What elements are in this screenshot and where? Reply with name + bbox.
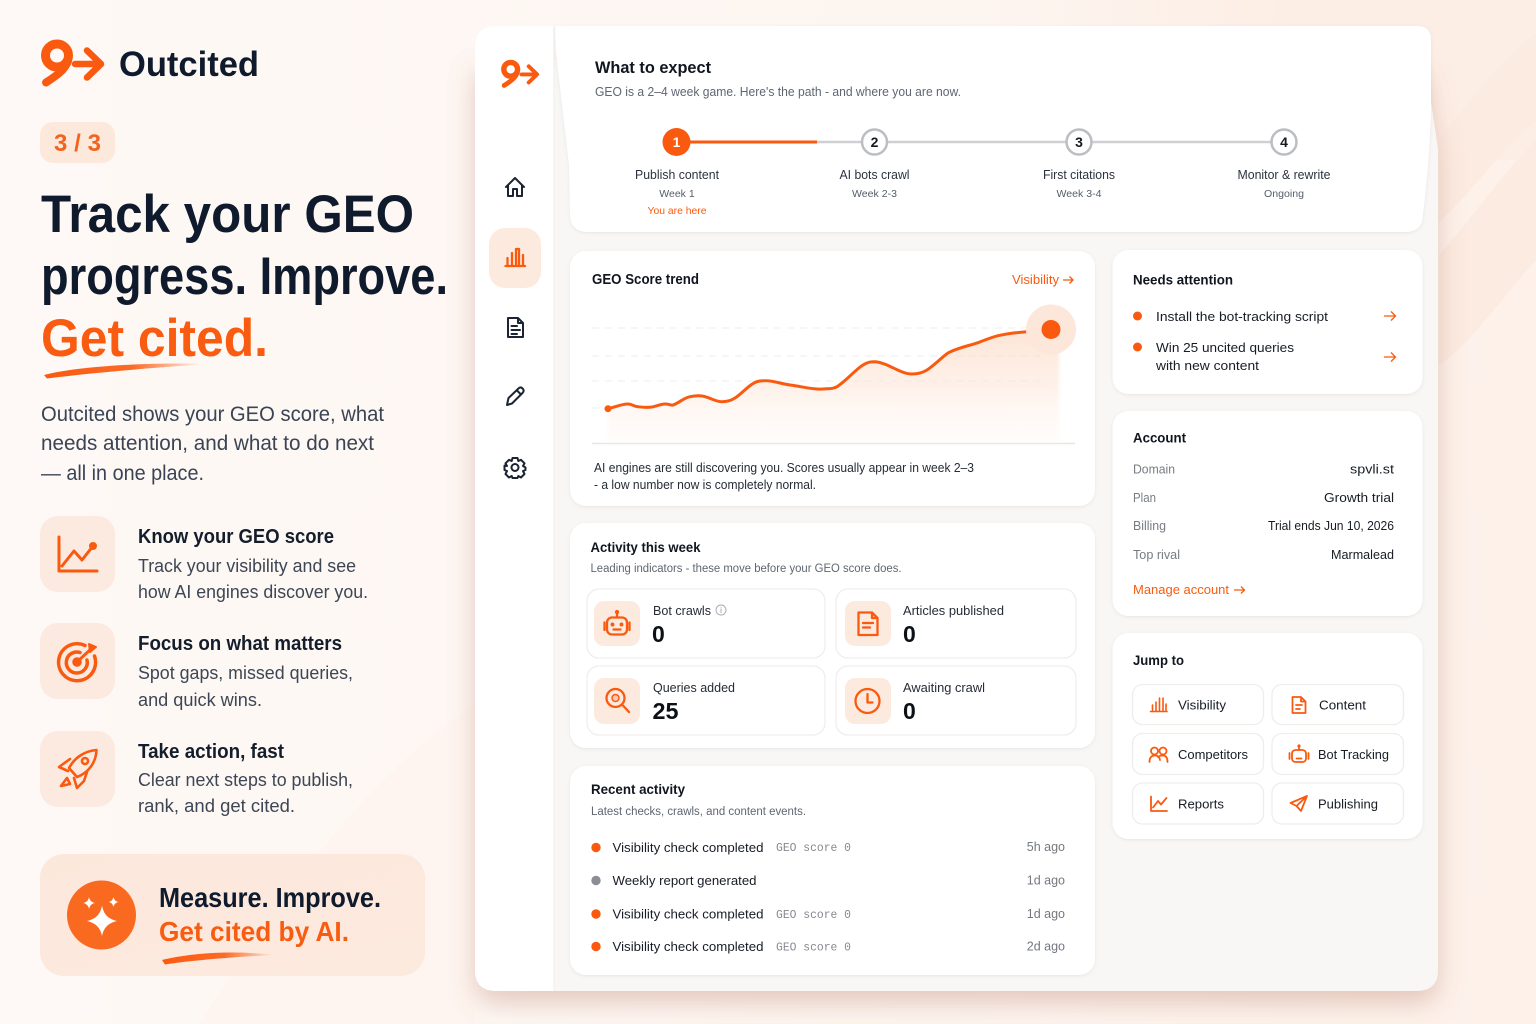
line chart [592,304,1076,444]
button: visibility [1132,684,1264,724]
link: manage account: Manage account [1133,583,1230,597]
panel: needs attention: Needs attention [1133,272,1233,288]
headline underline [44,364,205,378]
button: reports: Reports [1178,796,1224,812]
item: install script [1133,309,1396,324]
icon: rocket [59,750,96,788]
step 4: Monitor & rewrite [1238,168,1331,182]
panel: activity this week: Leading indicators - these move before your GEO score does. [590,563,902,575]
account rows: Marmalead [1331,548,1394,562]
item: win queries [1133,340,1396,373]
account rows: Billing [1133,519,1166,533]
panel: activity this week [570,523,1095,748]
feature: know your score [40,516,368,602]
feature: take action: rank, and get cited. [138,796,295,816]
icon: info: i [720,606,722,615]
icon: sparkles [67,880,136,950]
icon: logo mark [46,44,101,82]
step 1 [635,128,720,217]
stat: bot crawls [587,589,825,658]
panel: GEO score trend: GEO Score trend [592,272,699,288]
item: win queries: Win 25 uncited queries [1156,340,1295,355]
row 2: 1d ago [1027,874,1065,888]
step 3: First citations [1043,168,1115,182]
button: bot tracking: Bot Tracking [1318,747,1389,762]
feature: focus [40,623,353,710]
stat: queries added [587,666,825,735]
brand logo [46,44,259,84]
account rows: Growth trial [1324,491,1394,505]
chart note [594,461,974,492]
button: competitors: Competitors [1178,747,1248,762]
button: publishing: Publishing [1318,796,1378,812]
callout: Get cited by AI. [159,916,349,947]
button: reports [1132,783,1264,824]
headline: Get cited. [41,309,268,368]
panel: account [1112,411,1422,616]
step 4 [1238,130,1331,200]
step 3: 3 [1075,134,1083,150]
stat: awaiting crawl: Awaiting crawl [903,681,985,695]
feature: take action [40,731,353,816]
row 4: GEO score 0 [776,942,851,954]
step 2 [840,130,910,200]
step 2: AI bots crawl [840,168,910,182]
stepper [635,128,1331,217]
stat: awaiting crawl [836,666,1076,735]
panel: what to expect [555,26,1431,232]
panel: recent activity: Latest checks, crawls, and content events. [591,806,806,818]
button: competitors [1132,734,1264,774]
callout [40,854,425,976]
row 2 [591,873,1065,888]
feature: know your score: Track your visibility and see [138,556,356,576]
account rows: Top rival [1133,548,1180,562]
row 3: 1d ago [1027,907,1065,921]
button: publishing [1272,783,1404,824]
headline [41,185,448,368]
row 1: 5h ago [1027,840,1065,854]
row 4 [591,939,1065,954]
feature: know your score: Know your GEO score [138,526,334,548]
icon: document [508,318,523,337]
feature: take action: Clear next steps to publish, [138,770,353,790]
panel: what to expect: What to expect [595,58,711,77]
panel: account: Account [1133,430,1186,446]
intro paragraph: Outcited shows your GEO score, what [41,403,384,426]
step 1: You are here [648,205,707,217]
chart note: AI engines are still discovering you. Scores usually appear in week 2–3 [594,461,974,475]
icon: search [606,689,629,712]
account rows [1133,462,1395,562]
account rows: spvli.st [1350,462,1395,476]
feature: take action: Take action, fast [138,741,284,763]
row 4: Visibility check completed [612,939,764,954]
step 2: 2 [871,134,879,150]
step badge: 3 / 3 [54,130,101,157]
panel: activity this week: Activity this week [590,539,701,555]
stat: bot crawls: Bot crawls [653,604,711,618]
step 1: Publish content [635,168,720,182]
step 3: Week 3-4 [1056,188,1102,200]
row 1: Visibility check completed [612,840,764,855]
nav item: active chart [489,228,541,288]
headline: Track your GEO [41,185,414,244]
button: bot tracking [1272,734,1404,774]
link: visibility: Visibility [1012,273,1060,287]
panel: recent activity: Recent activity [591,781,685,797]
panel: what to expect: GEO is a 2–4 week game. Here's the path - and where you are now. [595,85,961,99]
icon: sidebar logo [504,62,537,86]
icon: target [59,644,96,681]
panel: needs attention [1112,250,1422,394]
icon: clock [856,689,880,713]
account rows: Plan [1133,491,1156,505]
feature: focus: Focus on what matters [138,633,342,655]
panel: jump to [1112,633,1422,839]
app window [475,26,1438,991]
feature: focus: Spot gaps, missed queries, [138,663,353,683]
icon: gear [504,458,526,478]
row 2: Weekly report generated [612,873,756,888]
icon: pencil [507,387,524,405]
callout underline [162,953,274,964]
row 3 [591,906,1065,922]
stat: articles published: Articles published [903,604,1004,618]
stat: articles published [836,589,1076,658]
stat: queries added: Queries added [653,681,735,695]
icon: line chart [59,537,97,571]
feature: focus: and quick wins. [138,690,262,710]
account rows: Domain [1133,462,1175,476]
account rows: Trial ends Jun 10, 2026 [1268,519,1394,533]
row 1: GEO score 0 [776,842,851,855]
step 3 [1043,130,1115,200]
panel: recent activity [570,766,1095,975]
row 3: Visibility check completed [612,906,764,922]
item: install script: Install the bot-tracking script [1156,309,1328,324]
callout: Measure. Improve. [159,882,381,913]
headline: progress. Improve. [41,247,448,306]
icon: home [506,178,524,196]
panel: jump to: Jump to [1133,652,1184,668]
stat: bot crawls: 0 [652,621,665,647]
intro paragraph [41,403,384,485]
stat: articles published: 0 [903,621,916,647]
panel: GEO score trend [570,251,1095,506]
logo wordmark: Outcited [119,45,259,84]
icon: robot [604,611,630,634]
step 1: Week 1 [659,188,695,200]
feature: know your score: how AI engines discover you. [138,582,368,602]
step 1: 1 [673,134,681,150]
step 2: Week 2-3 [852,188,897,200]
stat: awaiting crawl: 0 [903,698,916,724]
step badge [40,122,115,163]
intro paragraph: needs attention, and what to do next [41,432,374,455]
current score marker [1026,304,1076,354]
stat: queries added: 25 [652,698,679,724]
icon: document [858,612,878,635]
button: content [1272,684,1404,724]
step 4: Ongoing [1264,188,1304,200]
step 4: 4 [1280,134,1288,150]
row 4: 2d ago [1027,940,1065,954]
button: visibility: Visibility [1178,698,1227,712]
icon: info [716,605,726,615]
row 3: GEO score 0 [776,909,851,922]
item: win queries: with new content [1155,358,1259,373]
row 1 [591,840,1065,855]
button: content: Content [1319,698,1366,712]
panel: sidebar [475,26,554,991]
trend line [608,332,1027,409]
chart note: - a low number now is completely normal. [594,478,816,492]
intro paragraph: — all in one place. [41,462,204,485]
